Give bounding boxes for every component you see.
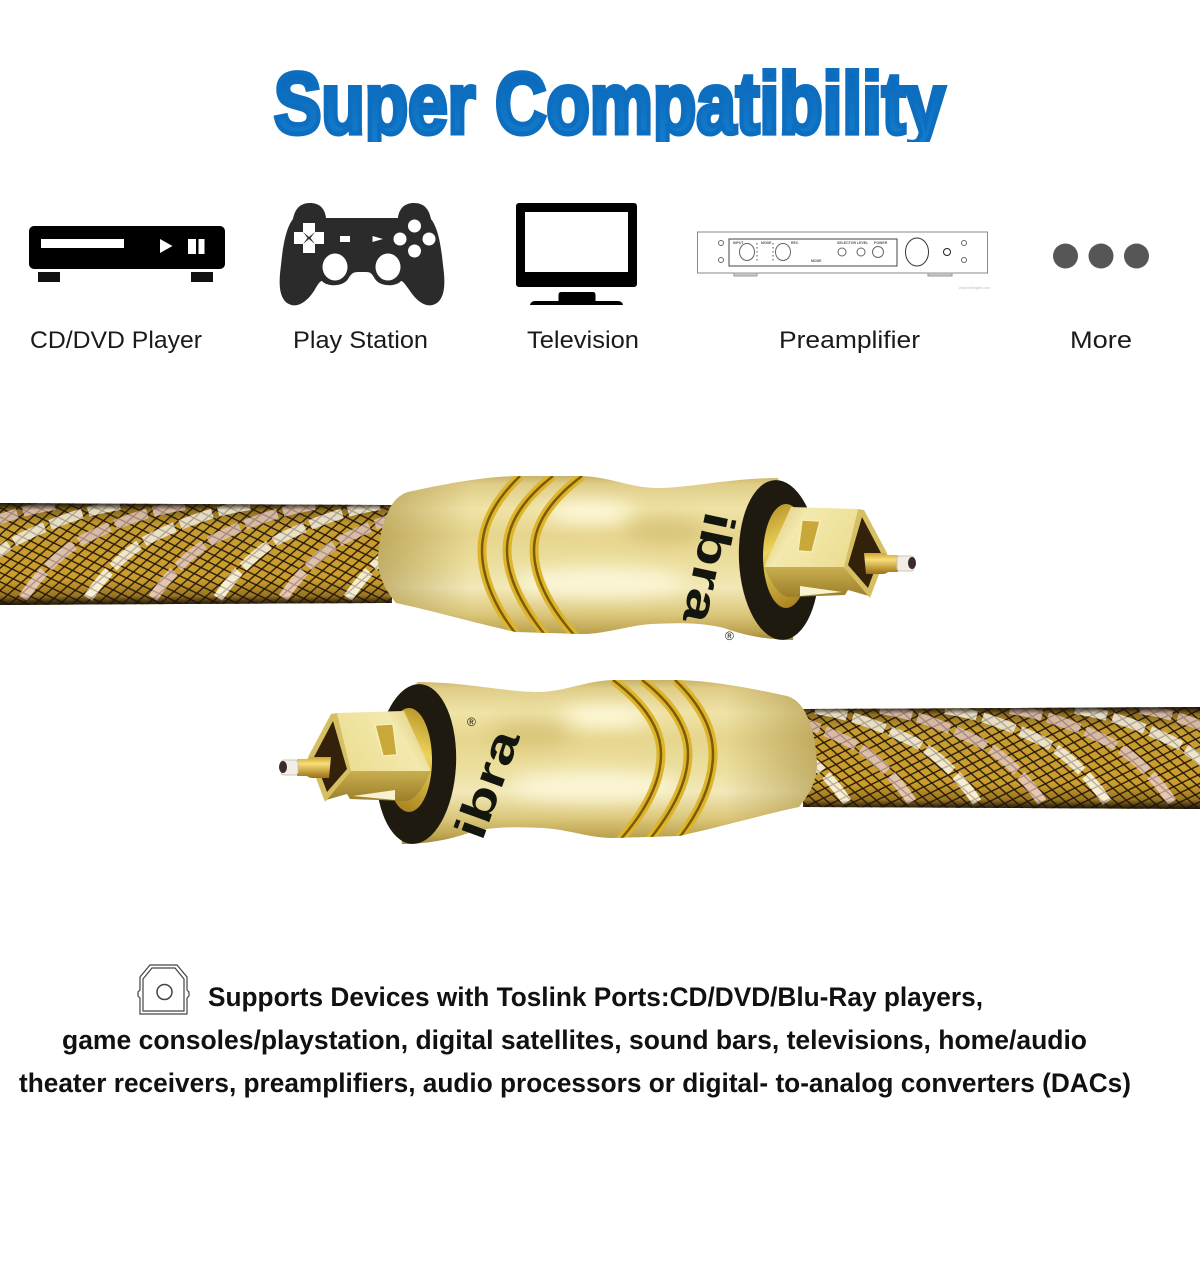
label: Television: Television — [527, 327, 639, 354]
plug hexagon end — [844, 509, 887, 598]
black ring — [735, 478, 823, 642]
device row — [29, 203, 1149, 354]
label: Preamplifier: Preamplifier — [779, 327, 920, 354]
logo: lower ibra: ibra — [445, 723, 530, 845]
watermark: www.hifiengine.com — [959, 286, 990, 290]
label: Play Station: Play Station — [293, 327, 428, 354]
connector: upper gold plug — [370, 470, 916, 645]
cable: upper braided sleeve — [0, 503, 510, 605]
text block: supported devices: Supports Devices with Toslink Ports:CD/DVD/Blu-Ray players, — [208, 982, 983, 1012]
icon: preamplifier — [698, 232, 988, 276]
ferrule tip — [864, 553, 898, 574]
icon: preamplifier: INPUT — [733, 241, 744, 245]
gold collar — [763, 504, 809, 608]
plug top face — [764, 507, 858, 567]
connector: lower gold plug — [279, 674, 825, 849]
text block: supported devices — [19, 982, 1131, 1098]
cable: lower braided sleeve — [685, 707, 1200, 809]
icon: television — [516, 203, 637, 305]
gold grooves — [482, 476, 582, 636]
label: More: More — [1070, 327, 1132, 354]
icon: preamplifier: POWER — [874, 241, 888, 245]
label: CD/DVD Player: CD/DVD Player — [30, 327, 202, 354]
title: Super Compatibility — [274, 56, 945, 152]
icon: preamplifier: MODE — [811, 259, 822, 263]
metal barrel — [378, 476, 800, 640]
icon: preamplifier: REC — [791, 241, 799, 245]
plug lower face — [764, 567, 869, 597]
text block: supported devices: theater receivers, preamplifiers, audio processors or digital- to-analog converters (DACs) — [19, 1068, 1131, 1098]
icon: preamplifier: LEVEL — [857, 241, 869, 245]
text block: supported devices: game consoles/playstation, digital satellites, sound bars, televisions, home/audio — [62, 1025, 1087, 1055]
icon: CD/DVD player — [29, 226, 225, 282]
icon: toslink port — [138, 965, 189, 1014]
registered mark: upper: ® — [725, 629, 734, 643]
icon: game controller — [280, 203, 444, 305]
icon: more dots — [1053, 244, 1149, 268]
logo: upper ibra: ibra — [673, 508, 744, 628]
icon: preamplifier: MODE — [761, 241, 772, 245]
registered mark: lower: ® — [467, 715, 476, 729]
icon: preamplifier: SELECTOR — [837, 241, 856, 245]
